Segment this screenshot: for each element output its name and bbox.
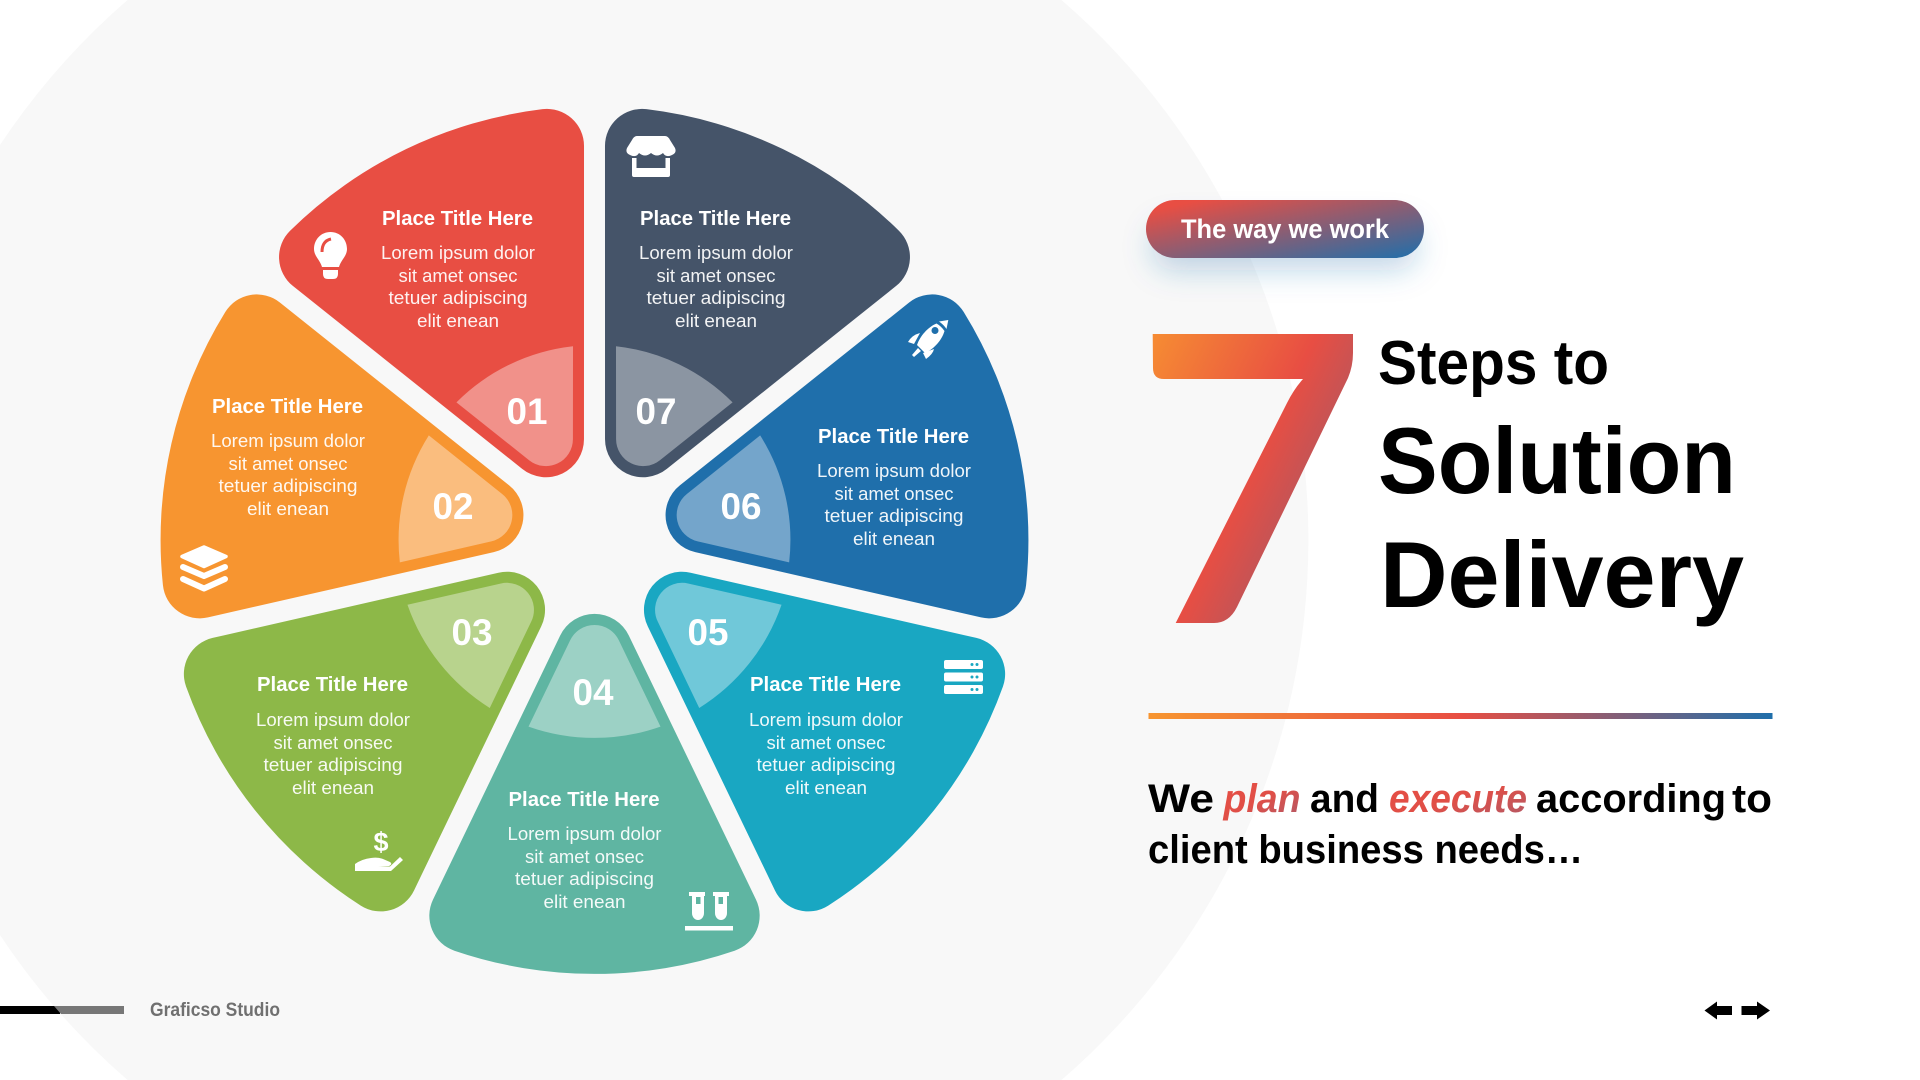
step 02 body text: elit enean: [247, 499, 329, 519]
step 05 body text: [749, 710, 903, 798]
icon: navigation arrows: [1704, 1002, 1770, 1020]
step 06 body text: Lorem ipsum dolor: [817, 461, 971, 481]
number 06: 06: [720, 486, 762, 527]
step 01 body text: sit amet onsec: [398, 266, 518, 286]
step 04 body text: [508, 824, 662, 912]
step 05 body text: tetuer adipiscing: [756, 755, 896, 775]
number 07: 07: [636, 391, 676, 432]
step 07 body text: [639, 243, 793, 331]
step 02 body text: tetuer adipiscing: [218, 476, 358, 496]
step 05 body text: elit enean: [785, 778, 867, 798]
gradient divider: [1148, 713, 1772, 719]
panel: step 01: [257, 77, 711, 545]
step 01 body text: [381, 243, 535, 331]
icon: light bulb: [314, 232, 347, 279]
icon: hand with dollar: [355, 827, 403, 871]
number 02: 02: [432, 486, 474, 527]
panel: step 05: [549, 457, 1037, 940]
step 06 body text: [817, 461, 971, 549]
tagline: to: [1732, 777, 1772, 821]
step 04 body text: Lorem ipsum dolor: [508, 824, 662, 844]
icon: test tubes: [685, 892, 733, 930]
footer bar: [0, 1006, 124, 1014]
icon: layers: [182, 547, 226, 588]
icon: server: [944, 660, 983, 694]
step 05 title: Place Title Here: [750, 674, 901, 696]
footer text: studio name: Graficso Studio: [150, 1000, 280, 1021]
step 01 body text: elit enean: [417, 311, 499, 331]
tagline: according: [1536, 777, 1726, 821]
number 05: 05: [688, 612, 728, 653]
step 07 body text: elit enean: [675, 311, 757, 331]
big numeral seven: [1153, 334, 1353, 623]
step 05 body text: sit amet onsec: [766, 733, 886, 753]
panel: step 06: [630, 282, 1054, 685]
tagline: plan: [1223, 777, 1300, 821]
tagline: We: [1148, 777, 1214, 821]
number 03: 03: [452, 612, 492, 653]
step 06 body text: sit amet onsec: [834, 484, 954, 504]
panel: step 07: [478, 77, 932, 545]
badge: the way we work: [1146, 200, 1424, 270]
number 01: 01: [506, 391, 548, 432]
tagline: [1148, 777, 1772, 872]
panel: step 04: [429, 614, 760, 974]
step 04 title: Place Title Here: [508, 789, 660, 811]
icon: store: [626, 136, 676, 177]
step 01 body text: tetuer adipiscing: [388, 288, 528, 308]
tagline: client business needs…: [1148, 828, 1583, 872]
title: steps to solution delivery: Solution: [1378, 408, 1736, 513]
icon: rocket: [908, 320, 948, 359]
step 03 body text: [256, 710, 410, 798]
step 03 body text: sit amet onsec: [274, 733, 392, 753]
step 07 body text: tetuer adipiscing: [646, 288, 786, 308]
icon: hand with dollar: $: [373, 827, 389, 857]
tagline: execute: [1389, 777, 1527, 821]
step 02 body text: [211, 431, 365, 519]
step 03 body text: Lorem ipsum dolor: [256, 710, 410, 730]
step 04 body text: sit amet onsec: [525, 847, 644, 867]
step 01 title: Place Title Here: [382, 208, 533, 230]
step 03 body text: tetuer adipiscing: [264, 755, 402, 775]
step 07 body text: sit amet onsec: [656, 266, 776, 286]
step 06 body text: tetuer adipiscing: [824, 506, 964, 526]
tagline: and: [1310, 777, 1379, 821]
badge: the way we work: The way we work: [1181, 214, 1390, 244]
step 04 body text: tetuer adipiscing: [515, 869, 654, 889]
panel: step 02: [135, 282, 559, 685]
step 04 body text: elit enean: [544, 892, 626, 912]
title: steps to solution delivery: [1378, 329, 1744, 627]
step 05 body text: Lorem ipsum dolor: [749, 710, 903, 730]
step 06 body text: elit enean: [853, 529, 935, 549]
step 07 title: Place Title Here: [640, 208, 791, 230]
number 04: 04: [572, 672, 614, 713]
title: steps to solution delivery: Steps to: [1378, 329, 1609, 398]
step 03 body text: elit enean: [292, 778, 374, 798]
step 03 title: Place Title Here: [257, 674, 408, 696]
panel: step 03: [152, 457, 640, 940]
step 06 title: Place Title Here: [818, 426, 969, 448]
step 02 title: Place Title Here: [212, 396, 363, 418]
background circle: [0, 0, 1308, 1080]
step 07 body text: Lorem ipsum dolor: [639, 243, 793, 263]
step 01 body text: Lorem ipsum dolor: [381, 243, 535, 263]
title: steps to solution delivery: Delivery: [1380, 522, 1744, 627]
step 02 body text: Lorem ipsum dolor: [211, 431, 365, 451]
step 02 body text: sit amet onsec: [228, 454, 348, 474]
